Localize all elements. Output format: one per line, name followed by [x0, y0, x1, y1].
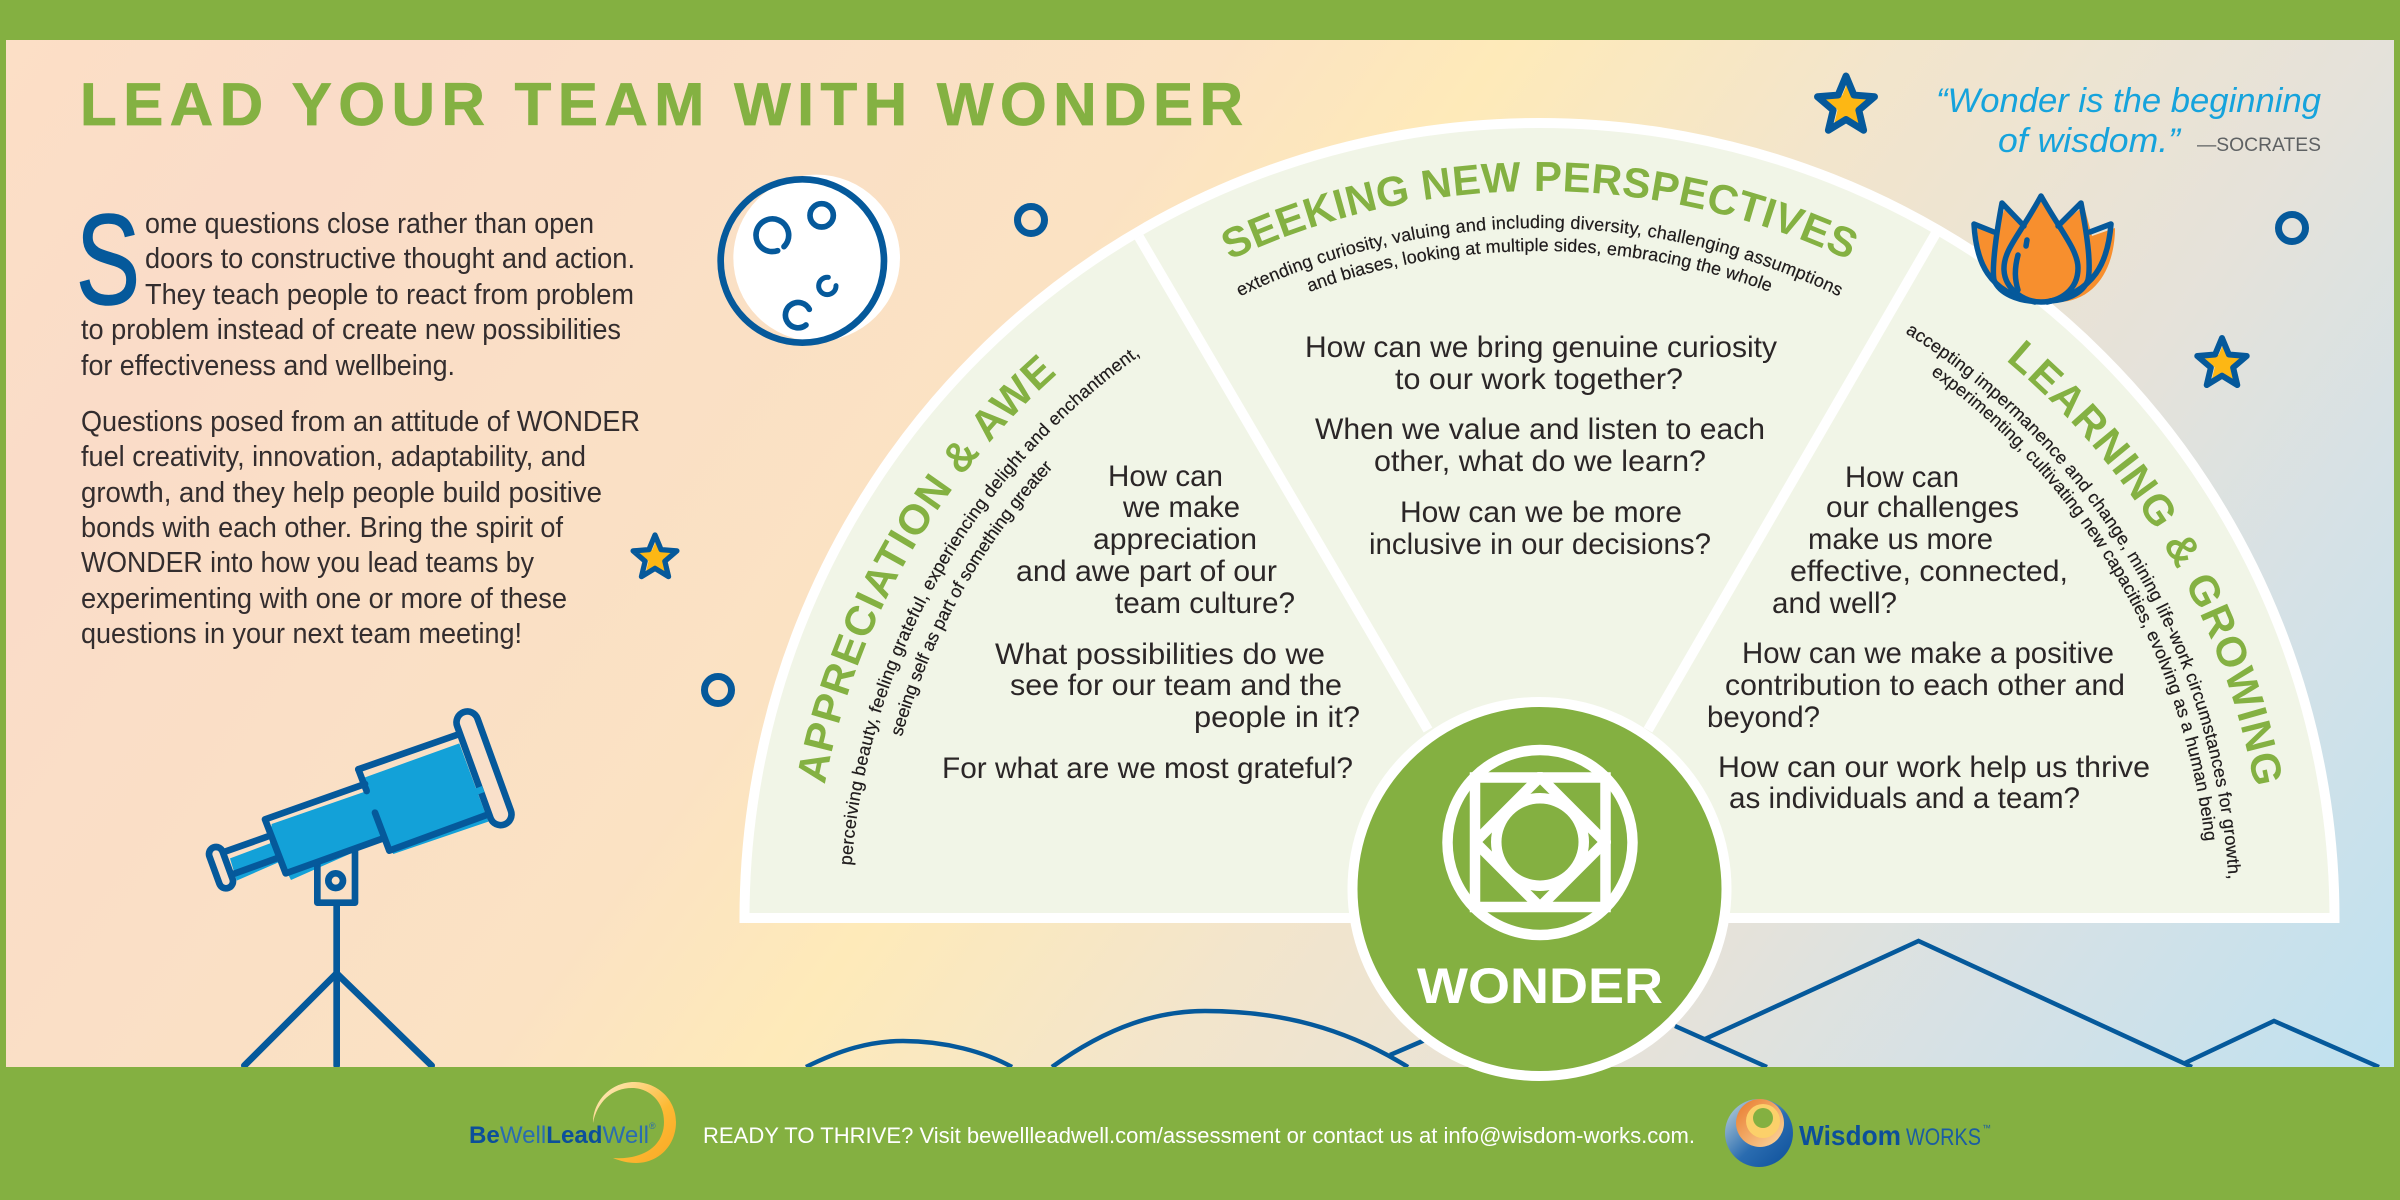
fan dividers	[1139, 233, 1936, 730]
questions: learning and growing: effective, connected,	[1790, 555, 2068, 588]
description: seeking new perspectives: extending curiosity, valuing and including diversity, challenging assumptions	[1238, 214, 1842, 296]
questions: seeking new perspectives: How can we be more	[1400, 496, 1682, 529]
intro text block: growth, and they help people build positive	[81, 477, 602, 509]
drop cap: S	[76, 189, 140, 332]
description: appreciation and awe: perceiving beauty, feeling grateful, experiencing delight and enchantment,	[842, 350, 1140, 865]
icon: telescope	[216, 722, 501, 1066]
questions: appreciation and awe: What possibilities do we	[995, 638, 1325, 671]
description: learning and growing: accepting impermanence and change, mining life-work circumstances for growth,	[1906, 326, 2241, 878]
questions: appreciation and awe: For what are we most grateful?	[942, 752, 1353, 785]
questions: learning and growing: as individuals and a team?	[1729, 782, 2080, 815]
questions: learning and growing: make us more	[1808, 523, 1993, 556]
icon: lotus	[1974, 196, 2115, 302]
questions: seeking new perspectives: to our work together?	[1395, 363, 1683, 396]
description: learning and growing: experimenting, cultivating new capacities, evolving as a human being	[1932, 368, 2216, 840]
label: wonder: WONDER	[1417, 958, 1663, 1014]
icon: star	[633, 535, 679, 577]
heading: seeking new perspectives: SEEKING NEW PERSPECTIVES	[1222, 162, 1856, 257]
questions: appreciation and awe: people in it?	[1194, 701, 1360, 734]
questions: learning and growing: How can our work help us thrive	[1718, 751, 2150, 784]
logo: wisdom works: Wisdom	[1799, 1120, 1901, 1151]
questions: learning and growing: and well?	[1772, 587, 1897, 620]
icon: small ring	[2278, 214, 2306, 242]
logo: wisdom works: WORKS	[1906, 1124, 1981, 1151]
questions: seeking new perspectives	[1305, 331, 1777, 561]
quote: “Wonder is the beginning	[1936, 82, 2321, 120]
questions: appreciation and awe	[942, 460, 1360, 785]
logo: be well lead well: ®	[649, 1121, 656, 1131]
questions: seeking new perspectives: When we value and listen to each	[1315, 413, 1765, 446]
heading: learning and growing: LEARNING & GROWING	[2008, 340, 2281, 784]
icon: small ring	[1018, 206, 1044, 234]
heading: appreciation and awe: APPRECIATION & AWE	[798, 354, 1056, 784]
intro text block: doors to constructive thought and action.	[145, 243, 635, 275]
semicircle wonder fan	[740, 118, 2340, 923]
questions: appreciation and awe: and awe part of our	[1016, 555, 1277, 588]
questions: learning and growing: beyond?	[1707, 701, 1820, 734]
panel: seeking new perspectives	[1222, 162, 1856, 561]
description: appreciation and awe: seeing self as part of something greater	[893, 461, 1052, 736]
intro text block: to problem instead of create new possibilities	[81, 314, 621, 346]
questions: seeking new perspectives: inclusive in our decisions?	[1369, 528, 1711, 561]
questions: learning and growing: How can we make a positive	[1742, 637, 2114, 670]
questions: learning and growing: contribution to each other and	[1725, 669, 2125, 702]
logo: be well lead well	[469, 1082, 676, 1163]
questions: seeking new perspectives: How can we bring genuine curiosity	[1305, 331, 1777, 364]
questions: appreciation and awe: How can	[1108, 460, 1223, 493]
questions: learning and growing: our challenges	[1826, 491, 2019, 524]
title: LEAD YOUR TEAM WITH WONDER	[80, 71, 1243, 138]
questions: learning and growing	[1707, 461, 2150, 815]
intro text block: bonds with each other. Bring the spirit of	[81, 512, 564, 544]
icon: moon	[721, 175, 900, 343]
icon: wonder mark	[1448, 750, 1632, 935]
quote: —SOCRATES	[2197, 135, 2321, 156]
questions: learning and growing: How can	[1845, 461, 1959, 494]
description: seeking new perspectives: and biases, looking at multiple sides, embracing the whole	[1308, 238, 1772, 292]
questions: seeking new perspectives: other, what do we learn?	[1374, 445, 1706, 478]
icon: star	[1817, 76, 1877, 130]
questions: appreciation and awe: team culture?	[1115, 587, 1295, 620]
intro text block: Questions posed from an attitude of WONDER	[81, 406, 640, 438]
intro text block: ome questions close rather than open	[145, 208, 594, 240]
wonder central circle	[1352, 702, 1726, 1076]
questions: appreciation and awe: appreciation	[1093, 523, 1257, 556]
questions: appreciation and awe: we make	[1122, 491, 1240, 524]
icon: star	[2197, 338, 2249, 385]
intro text block: WONDER into how you lead teams by	[81, 547, 534, 579]
panel: learning and growing	[1707, 326, 2281, 878]
intro text block: experimenting with one or more of these	[81, 583, 567, 615]
intro text block	[76, 189, 640, 650]
intro text block: fuel creativity, innovation, adaptability, and	[81, 441, 586, 473]
intro text block: questions in your next team meeting!	[81, 618, 522, 650]
footer call to action: READY TO THRIVE? Visit bewellleadwell.com/assessment or contact us at info@wisdom-works.com.	[703, 1123, 1695, 1148]
intro text block: for effectiveness and wellbeing.	[81, 350, 455, 382]
footer band	[0, 1067, 2400, 1200]
logo: wisdom works: ™	[1982, 1123, 1991, 1133]
fan background	[744, 123, 2334, 918]
icon: small ring	[704, 676, 732, 704]
intro text block: They teach people to react from problem	[145, 279, 634, 311]
questions: appreciation and awe: see for our team and the	[1010, 669, 1342, 702]
quote	[1936, 82, 2321, 160]
logo: wisdom works	[1725, 1099, 1991, 1167]
quote: of wisdom.”	[1998, 122, 2182, 160]
logo: be well lead well: BeWellLeadWell	[469, 1122, 649, 1149]
panel: appreciation and awe	[798, 350, 1360, 865]
mountains and hills	[806, 941, 2379, 1067]
